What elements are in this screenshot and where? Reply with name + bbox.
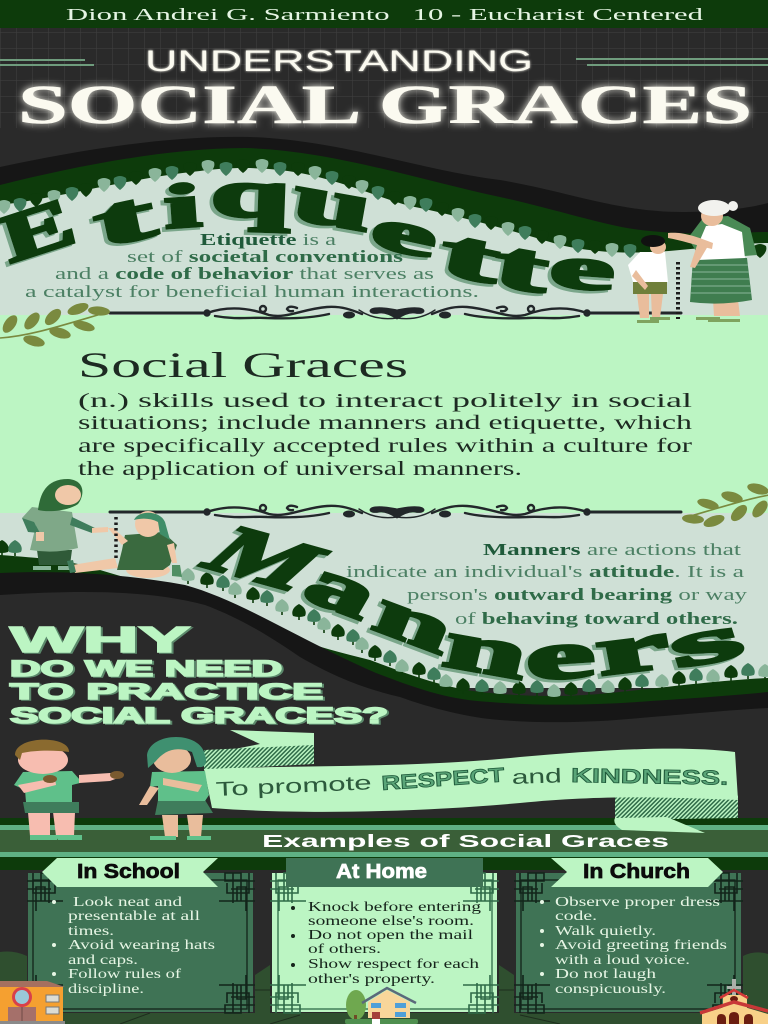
panel: in school xyxy=(27,858,255,1013)
manners word art: e xyxy=(522,616,598,695)
etiquette word art: e xyxy=(366,195,443,271)
tab: in church: In Church xyxy=(583,861,690,883)
list: in church: Avoid greeting friends xyxy=(555,938,727,953)
icon: house xyxy=(345,988,418,1024)
bottom scene background xyxy=(0,952,768,1024)
icon: grandmother and boy xyxy=(628,200,757,323)
top author bar: Dion Andrei G. Sarmiento 10 - Eucharist Centered xyxy=(66,5,704,24)
manners definition text: indicate an individual's attitude . It is a xyxy=(346,562,745,581)
etiquette definition text: and a code of behavior that serves as xyxy=(55,264,434,283)
etiquette definition text: a catalyst for beneficial human interactions. xyxy=(25,282,479,301)
list: at home: someone else's room. xyxy=(308,914,474,929)
why heading: DO WE NEED xyxy=(10,656,282,681)
ribbon message xyxy=(215,764,728,801)
etiquette word art: u xyxy=(288,158,378,246)
social graces definition text: situations; include manners and etiquette, which xyxy=(78,413,692,434)
list: in church: conspicuously. xyxy=(555,982,666,997)
list: in church: code. xyxy=(555,909,597,924)
why heading: WHY xyxy=(10,619,190,660)
etiquette word art: t xyxy=(489,225,554,308)
etiquette word art: t xyxy=(87,176,161,261)
right header lines xyxy=(576,59,768,65)
why heading: TO PRACTICE xyxy=(10,679,323,704)
why heading xyxy=(10,619,388,728)
manners word art: M xyxy=(184,514,346,603)
social graces definition text: the application of universal manners. xyxy=(78,459,522,480)
manners definition text xyxy=(346,540,748,628)
social graces definition panel xyxy=(0,315,768,513)
list: in school: and caps. xyxy=(68,953,138,968)
manners word art xyxy=(184,514,751,695)
list: at home: Knock before entering xyxy=(308,900,481,915)
panel: at home xyxy=(270,858,499,1013)
list: at home: other's property. xyxy=(308,972,435,987)
divider: etiquette xyxy=(110,306,681,319)
tab: in church xyxy=(551,858,723,887)
etiquette word art xyxy=(0,155,616,308)
divider: manners xyxy=(110,505,681,518)
ribbon message: KINDNESS. xyxy=(571,765,728,790)
etiquette word art: t xyxy=(435,213,506,299)
panel: in church xyxy=(514,858,743,1013)
etiquette definition text: set of societal conventions xyxy=(127,247,404,266)
icon: girls helping xyxy=(22,479,182,578)
social graces definition text xyxy=(78,391,693,480)
etiquette wave background xyxy=(0,137,768,330)
list: at home: of others. xyxy=(308,942,381,957)
manners word art: n xyxy=(364,574,464,668)
list: at home xyxy=(291,900,481,987)
icon: branch top right xyxy=(682,481,768,529)
list: in school: discipline. xyxy=(68,982,144,997)
list: at home: Show respect for each xyxy=(308,957,479,972)
icon: school building xyxy=(0,981,65,1024)
title xyxy=(18,45,752,135)
social graces definition text: are specifically accepted rules within a culture for xyxy=(78,436,693,457)
list: in church: Do not laugh xyxy=(555,967,656,982)
list: in church: with a loud voice. xyxy=(555,953,690,968)
etiquette definition text xyxy=(25,230,479,301)
list: in school: Avoid wearing hats xyxy=(68,938,215,953)
ribbon banner xyxy=(204,730,738,833)
manners word art: a xyxy=(292,543,392,633)
manners definition text: Manners are actions that xyxy=(483,540,741,559)
icon: church xyxy=(700,979,768,1024)
manners definition text: of behaving toward others. xyxy=(455,609,738,628)
etiquette leaf garland xyxy=(0,159,766,258)
list: in church xyxy=(540,895,727,997)
manners word art: n xyxy=(438,605,535,694)
etiquette word art: i xyxy=(162,171,203,242)
list: in church: Walk quietly. xyxy=(555,924,656,939)
tab: in school: In School xyxy=(77,861,180,883)
manners tree garland xyxy=(0,540,768,700)
left header lines xyxy=(0,60,94,65)
title: UNDERSTANDING xyxy=(145,45,533,78)
tab: at home: At Home xyxy=(336,861,427,883)
list: in school: presentable at all xyxy=(68,909,200,924)
heading: examples: Examples of Social Graces xyxy=(262,831,669,851)
icon: branch bottom left xyxy=(0,301,110,349)
manners definition text: person's outward bearing or way xyxy=(407,585,748,604)
title: SOCIAL GRACES xyxy=(18,74,752,135)
list: at home: Do not open the mail xyxy=(308,928,473,943)
icon: girl with hand on chest xyxy=(139,737,213,840)
social graces definition text: (n.) skills used to interact politely in social xyxy=(78,391,693,412)
manners background xyxy=(0,513,768,760)
list: in school: times. xyxy=(68,924,114,939)
why heading: SOCIAL GRACES? xyxy=(10,703,388,728)
manners word art: s xyxy=(660,601,751,681)
heading: social graces: Social Graces xyxy=(78,345,408,385)
examples band xyxy=(0,818,768,870)
tab: at home xyxy=(286,858,483,887)
manners word art: r xyxy=(590,607,675,690)
list: in school xyxy=(52,895,215,997)
header grid texture xyxy=(0,28,768,128)
tab: in school xyxy=(42,858,218,887)
icon: boy sharing cookie xyxy=(14,740,124,840)
etiquette word art: q xyxy=(209,155,291,233)
top author bar xyxy=(0,0,768,28)
ribbon message: RESPECT xyxy=(381,764,505,795)
etiquette word art: e xyxy=(548,233,616,303)
list: in church: Observe proper dress xyxy=(555,895,720,910)
list: in school: Look neat and xyxy=(73,895,182,910)
etiquette definition text: Etiquette is a xyxy=(200,230,337,249)
list: in school: Follow rules of xyxy=(68,967,181,982)
ribbon message: To promote xyxy=(215,772,372,801)
ribbon message: and xyxy=(511,765,562,789)
